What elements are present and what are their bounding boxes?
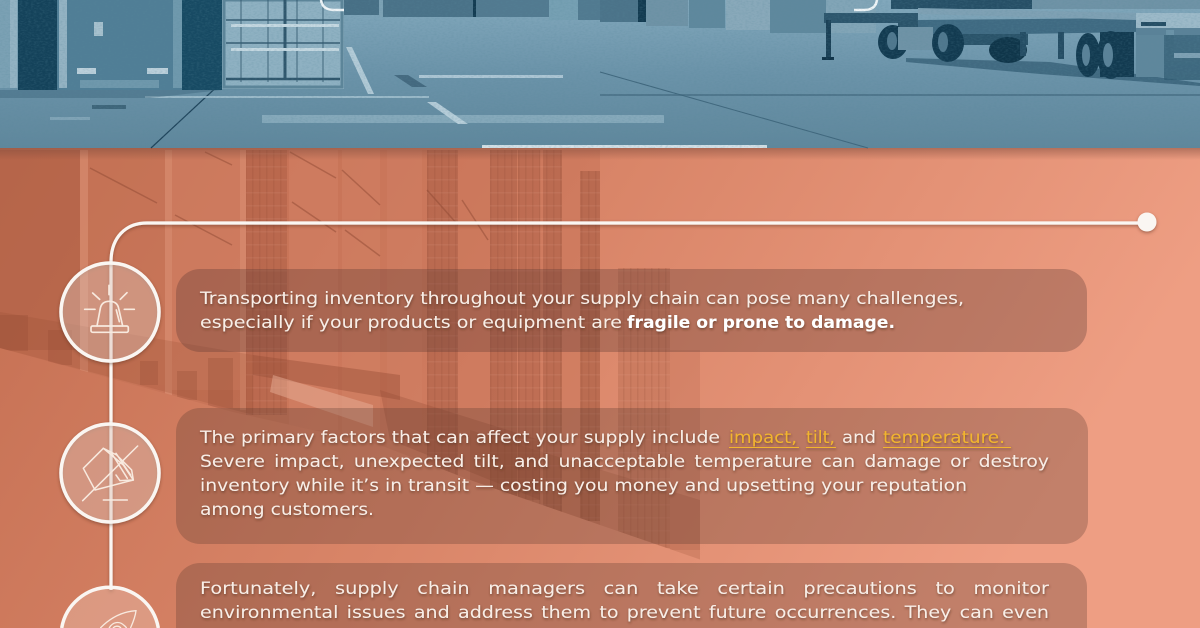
icon: tilted box <box>61 424 159 522</box>
text: primary factors paragraph: tilt, <box>806 428 835 448</box>
panel: warehouse yard photo <box>0 0 1200 148</box>
panel: text card 3 <box>176 563 1087 628</box>
text: intro paragraph: Transporting inventory throughout your supply chain can pose many challenges, <box>199 289 964 309</box>
text: intro paragraph <box>199 289 964 333</box>
text: intro paragraph: especially if your products or equipment are <box>200 313 622 333</box>
text: precautions paragraph: Fortunately, supply chain managers can take certain precautions to monitor <box>200 579 1049 599</box>
text: precautions paragraph: environmental issues and address them to prevent future occurrences. They can even <box>200 603 1049 623</box>
icon: alarm beacon <box>61 263 159 361</box>
background containers <box>344 0 876 33</box>
panel: text card 2 <box>176 408 1088 544</box>
timeline connector <box>111 212 1156 590</box>
icon: rocket <box>62 587 158 628</box>
text: precautions paragraph <box>200 579 1049 623</box>
shipping containers <box>0 0 344 90</box>
text: intro paragraph: fragile or prone to damage. <box>627 313 895 333</box>
warehouse building overlay <box>0 150 700 570</box>
title frame corners <box>321 0 877 10</box>
text: primary factors paragraph: The primary factors that can affect your supply include <box>199 428 720 448</box>
text: primary factors paragraph: impact, <box>729 428 797 448</box>
text: primary factors paragraph: inventory while it’s in transit — costing you money and upsetting your reputation <box>200 476 967 496</box>
text: primary factors paragraph: among customers. <box>200 500 374 520</box>
text: primary factors paragraph <box>199 428 1049 520</box>
panel: text card 1 <box>176 269 1087 352</box>
text: primary factors paragraph: temperature. <box>883 428 1005 448</box>
panel: orange background <box>0 148 1200 628</box>
truck and flatbed trailer <box>822 0 1200 86</box>
text: primary factors paragraph: and <box>842 428 876 448</box>
film grain <box>0 0 1200 148</box>
text: primary factors paragraph: Severe impact, unexpected tilt, and unacceptable temperature can damage or destroy <box>200 452 1049 472</box>
lower dock windows <box>0 312 700 565</box>
yard surface markings <box>0 47 1200 148</box>
